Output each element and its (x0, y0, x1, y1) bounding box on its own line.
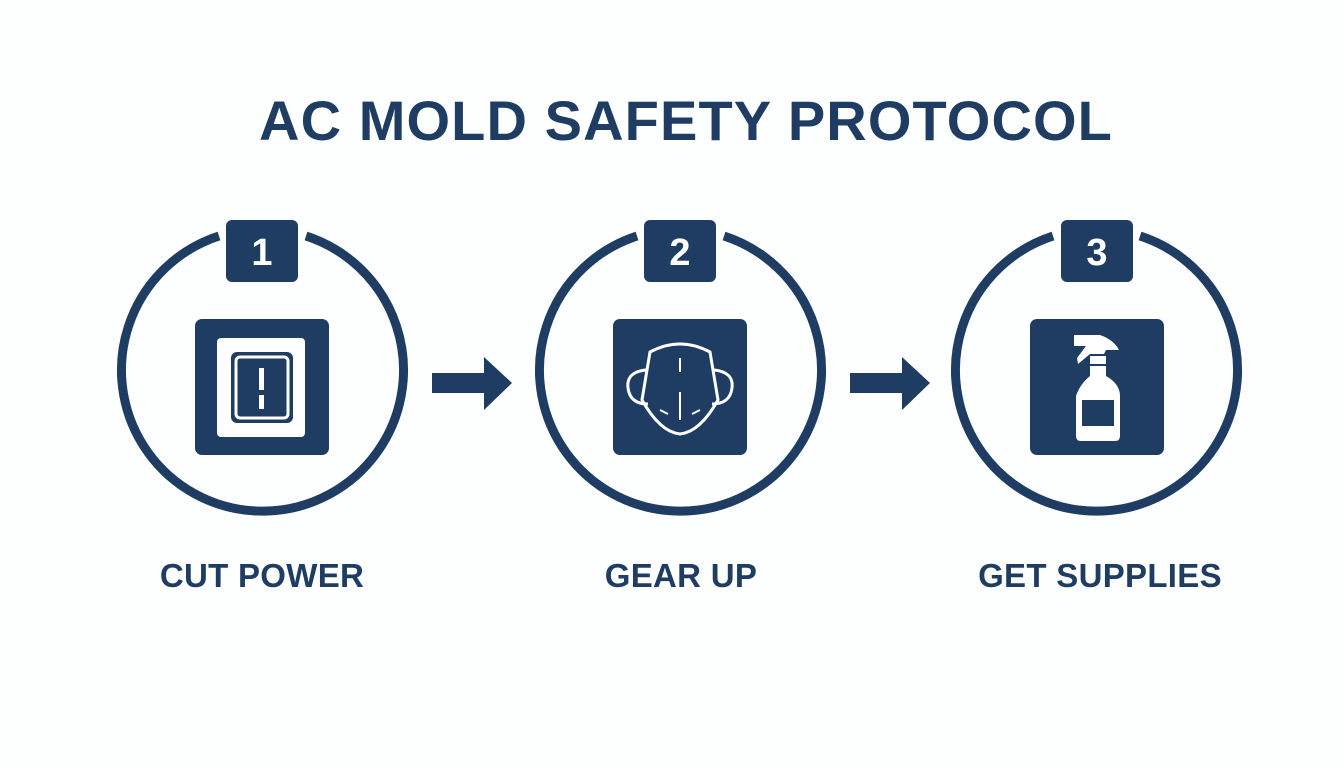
badge 2 (644, 220, 716, 282)
badge 1: 1 (251, 232, 273, 274)
badge 3: 3 (1086, 232, 1108, 274)
step 3 (956, 220, 1237, 511)
label 2: GEAR UP (605, 557, 757, 594)
circle 1 (121, 236, 403, 511)
arrow 1 (432, 357, 512, 410)
circle 2 (540, 236, 822, 511)
icon: respirator mask (613, 319, 747, 455)
icon: power switch (195, 319, 329, 455)
step 1 (121, 220, 403, 511)
icon: spray bottle (1030, 319, 1164, 455)
badge 2: 2 (669, 232, 691, 274)
label 3: GET SUPPLIES (978, 557, 1222, 594)
circle 3 (956, 236, 1237, 511)
arrow 2 (850, 357, 930, 410)
badge 1 (226, 220, 298, 282)
label 1: CUT POWER (160, 557, 364, 594)
step 2 (540, 220, 822, 511)
badge 3 (1061, 220, 1133, 282)
title: AC MOLD SAFETY PROTOCOL (259, 89, 1113, 152)
